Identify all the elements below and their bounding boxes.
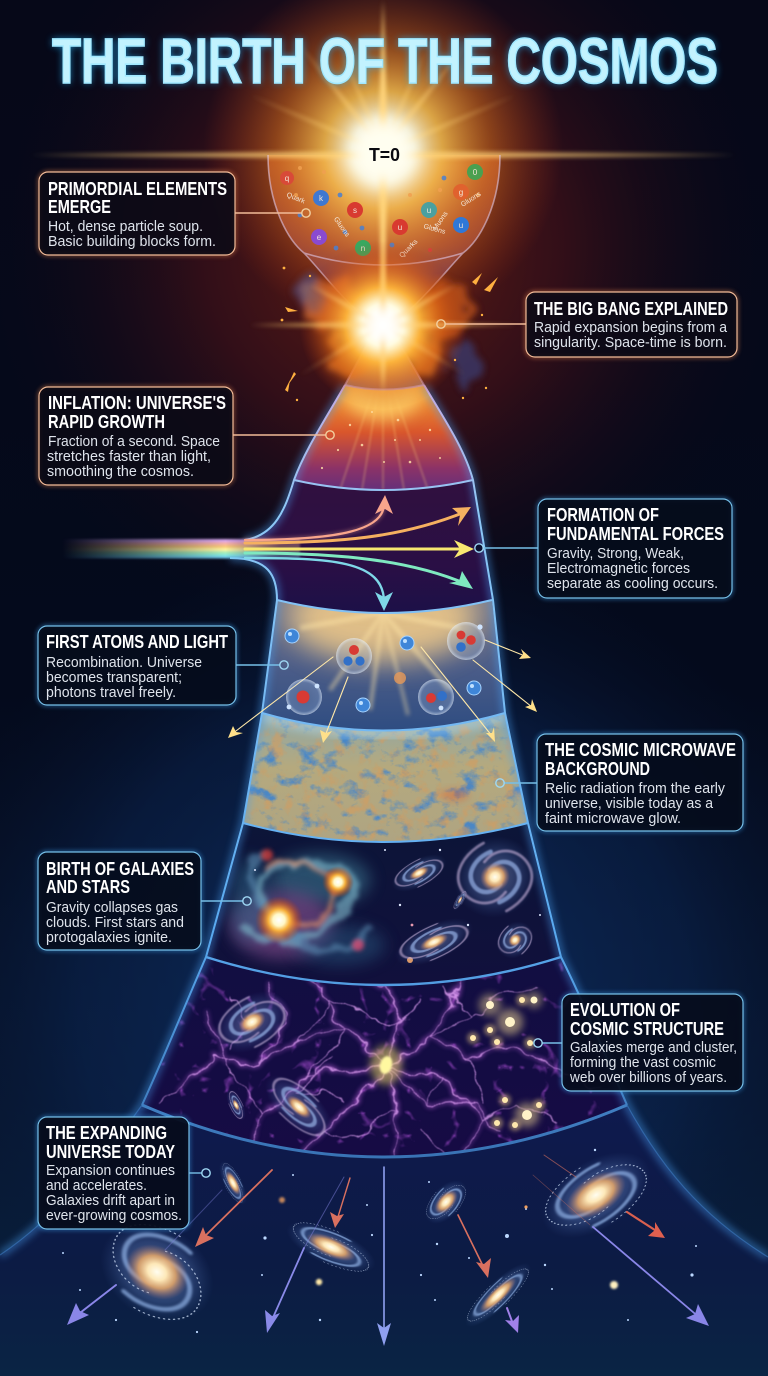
body: fundamental forces: Gravity, Strong, Weak, bbox=[547, 545, 684, 562]
body: inflation: Fraction of a second. Space bbox=[48, 433, 220, 450]
body: big bang: singularity. Space-time is born. bbox=[534, 334, 727, 351]
panel: the expanding universe today bbox=[38, 1117, 210, 1229]
galaxy large right bbox=[527, 1134, 665, 1256]
bowl particles: g bbox=[459, 188, 463, 197]
body: cmb bbox=[545, 780, 725, 827]
bowl particles: Muons bbox=[432, 210, 450, 232]
bowl particles: k bbox=[319, 194, 324, 203]
connector: cmb bbox=[496, 779, 537, 787]
body: galaxies: clouds. First stars and bbox=[46, 914, 184, 931]
body: evolution: forming the vast cosmic bbox=[570, 1054, 716, 1071]
heading: evolution bbox=[570, 1000, 724, 1039]
body: galaxies: Gravity collapses gas bbox=[46, 899, 178, 916]
body: galaxies bbox=[46, 899, 184, 946]
label: T=0: T=0 bbox=[369, 145, 400, 165]
section: cosmic web bbox=[135, 955, 635, 1165]
heading: fundamental forces: FORMATION OF bbox=[547, 505, 659, 525]
heading: galaxies bbox=[46, 859, 194, 897]
body: first atoms bbox=[46, 654, 202, 701]
body: primordial elements: Basic building blocks form. bbox=[48, 233, 216, 250]
atom: lower right bbox=[418, 679, 454, 715]
heading: primordial elements: EMERGE bbox=[48, 197, 111, 217]
heading: evolution: EVOLUTION OF bbox=[570, 1000, 680, 1020]
body: big bang: Rapid expansion begins from a bbox=[534, 319, 728, 336]
heading: inflation: RAPID GROWTH bbox=[48, 412, 165, 432]
body: fundamental forces: separate as cooling occurs. bbox=[547, 575, 718, 592]
bowl: primordial soup bbox=[268, 155, 500, 318]
section: inflation bbox=[296, 385, 472, 489]
body: fundamental forces: Electromagnetic forces bbox=[547, 560, 690, 577]
bowl particles: Gluons bbox=[332, 216, 351, 239]
atom: lower left bbox=[286, 679, 322, 715]
connector: evolution bbox=[534, 1039, 562, 1047]
funnel lower region bbox=[0, 1105, 768, 1376]
connector: inflation bbox=[233, 431, 334, 439]
connector: expanding bbox=[189, 1169, 210, 1177]
heading: inflation: INFLATION: UNIVERSE'S bbox=[48, 393, 226, 413]
galaxy small centre bbox=[417, 1173, 475, 1231]
body: primordial elements: Hot, dense particle soup. bbox=[48, 218, 203, 235]
body: cmb: faint microwave glow. bbox=[545, 810, 681, 827]
atom: upper right bbox=[447, 622, 485, 660]
nebula around protogalaxy bbox=[230, 850, 385, 965]
panel: first atoms and light bbox=[38, 626, 288, 705]
body: first atoms: photons travel freely. bbox=[46, 684, 176, 701]
connector: fundamental forces bbox=[475, 544, 538, 552]
body: primordial elements bbox=[48, 218, 216, 250]
body: expanding bbox=[46, 1162, 182, 1224]
bowl particles: u bbox=[427, 206, 431, 215]
body: expanding: Galaxies drift apart in bbox=[46, 1192, 175, 1209]
panel: inflation bbox=[39, 387, 334, 485]
bowl particles: u bbox=[459, 221, 463, 230]
heading: expanding: UNIVERSE TODAY bbox=[46, 1142, 175, 1162]
panel: evolution of cosmic structure bbox=[534, 994, 743, 1091]
heading: expanding bbox=[46, 1123, 175, 1162]
galaxy centre left bbox=[280, 1211, 382, 1283]
body: inflation: stretches faster than light, bbox=[47, 448, 211, 465]
heading: inflation bbox=[48, 393, 226, 432]
section: first atoms bbox=[263, 601, 504, 730]
bowl particles: n bbox=[361, 244, 365, 253]
body: expanding: Expansion continues bbox=[46, 1162, 175, 1179]
neck below the singularity bbox=[345, 335, 424, 390]
expansion arrows bbox=[67, 1155, 709, 1346]
heading: cmb: BACKGROUND bbox=[545, 759, 650, 779]
body: cmb: Relic radiation from the early bbox=[545, 780, 725, 797]
body: big bang bbox=[534, 319, 728, 351]
heading: cmb bbox=[545, 740, 736, 779]
bowl particles: Quarks bbox=[398, 238, 420, 259]
body: expanding: ever-growing cosmos. bbox=[46, 1207, 182, 1224]
connector: galaxies bbox=[201, 897, 251, 905]
heading: primordial elements bbox=[48, 179, 227, 217]
body: first atoms: becomes transparent; bbox=[46, 669, 182, 686]
body: evolution: web over billions of years. bbox=[569, 1069, 727, 1086]
galaxy small edge-on bbox=[214, 1158, 252, 1208]
rainbow stream bbox=[60, 539, 300, 558]
panel: primordial elements bbox=[39, 172, 310, 255]
bowl particles: q bbox=[285, 174, 289, 183]
bowl outline bbox=[268, 155, 500, 318]
burst: T=0 star glow bbox=[30, 0, 736, 340]
panel: fundamental forces bbox=[475, 499, 732, 598]
heading: evolution: COSMIC STRUCTURE bbox=[570, 1019, 724, 1039]
body: evolution bbox=[569, 1039, 737, 1086]
heading: big bang: THE BIG BANG EXPLAINED bbox=[534, 299, 728, 319]
heading: primordial elements: PRIMORDIAL ELEMENTS bbox=[48, 179, 227, 199]
bowl particles: Gluons bbox=[460, 191, 483, 209]
bowl particles: s bbox=[353, 206, 357, 215]
bottom galaxies and expansion field bbox=[62, 1134, 697, 1343]
section: birth of galaxies bbox=[206, 820, 561, 985]
galaxy lower right bbox=[457, 1255, 539, 1335]
connector: big bang bbox=[437, 320, 526, 328]
panel: cosmic microwave background bbox=[496, 734, 743, 831]
web filaments bbox=[158, 962, 597, 1156]
bowl particles: u bbox=[398, 223, 402, 232]
heading: expanding: THE EXPANDING bbox=[46, 1123, 167, 1143]
panel: the big bang explained bbox=[437, 292, 737, 357]
heading: galaxies: BIRTH OF GALAXIES bbox=[46, 859, 194, 879]
heading: first atoms: FIRST ATOMS AND LIGHT bbox=[46, 632, 228, 652]
body: fundamental forces bbox=[547, 545, 718, 592]
heading: cmb: THE COSMIC MICROWAVE bbox=[545, 740, 736, 760]
section: fundamental forces bbox=[230, 480, 493, 613]
body: evolution: Galaxies merge and cluster, bbox=[570, 1039, 737, 1056]
atoms and photon rays bbox=[228, 622, 537, 743]
body: galaxies: protogalaxies ignite. bbox=[46, 929, 172, 946]
section: cosmic microwave background bbox=[244, 714, 527, 841]
panel: birth of galaxies and stars bbox=[38, 852, 251, 950]
body: inflation: smoothing the cosmos. bbox=[47, 463, 194, 480]
bowl particles: Gluons bbox=[423, 223, 446, 236]
force arrows from rainbow stream bbox=[60, 495, 474, 611]
funnel walls and rims bbox=[0, 335, 768, 1257]
body: first atoms: Recombination. Universe bbox=[46, 654, 202, 671]
bowl particles: Quark bbox=[285, 192, 306, 206]
connector: primordial elements bbox=[235, 209, 310, 217]
bowl particles: 0 bbox=[473, 168, 478, 177]
heading: galaxies: AND STARS bbox=[46, 877, 130, 897]
connector: first atoms bbox=[236, 661, 288, 669]
bowl particles bbox=[280, 164, 483, 259]
heading: fundamental forces bbox=[547, 505, 724, 544]
body: cmb: universe, visible today as a bbox=[545, 795, 714, 812]
atom: upper left bbox=[336, 638, 372, 674]
bowl particles: e bbox=[317, 233, 322, 242]
body: expanding: and accelerates. bbox=[46, 1177, 147, 1194]
galaxy large left bbox=[82, 1201, 232, 1343]
body: inflation bbox=[47, 433, 220, 480]
heading: fundamental forces: FUNDAMENTAL FORCES bbox=[547, 524, 724, 544]
burst: big bang singularity bbox=[250, 230, 516, 409]
